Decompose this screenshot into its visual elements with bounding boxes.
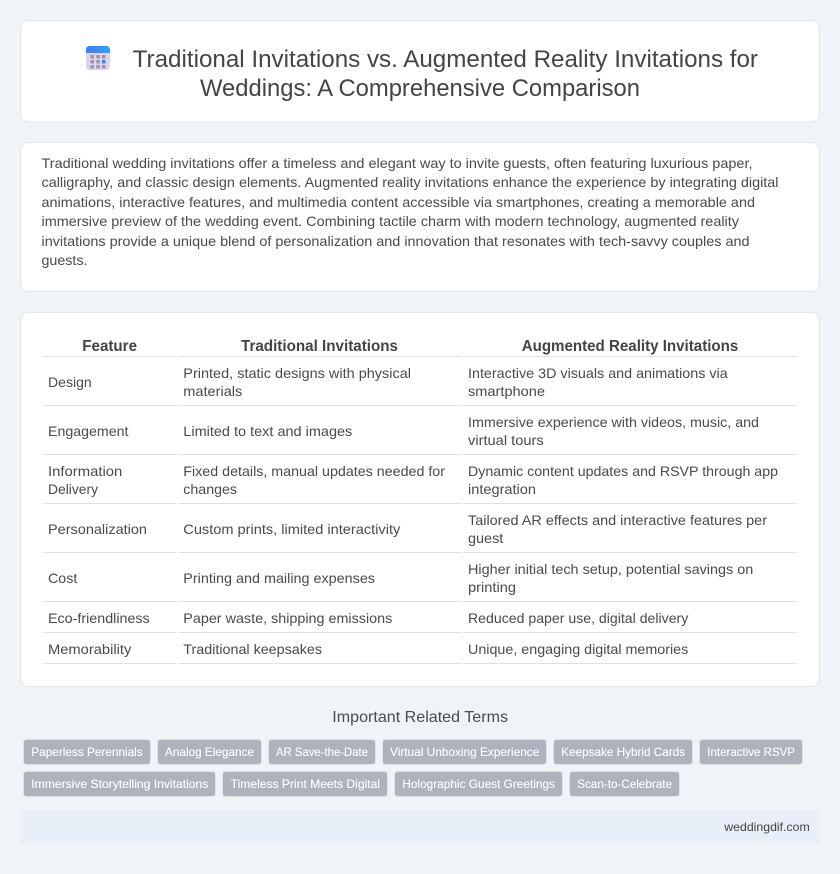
table row: personalization [48,512,767,546]
table row: cost: Printing and mailing expenses [183,570,375,586]
table row: eco-friendliness [48,610,688,626]
heading: important related terms: Important Related Terms [332,709,508,726]
related term tags: Scan-to-Celebrate [577,777,672,791]
text block: introduction paragraph: immersive preview of the wedding event. Combining tactile charm with modern technology, augmented reality [42,213,739,229]
table header: Feature [82,338,137,355]
table row: design [48,365,728,399]
related term tags: Interactive RSVP [707,745,795,759]
table header: Traditional Invitations [241,338,398,355]
table row: engagement: Engagement [48,423,129,439]
related term tags: Immersive Storytelling Invitations [31,777,208,791]
table row: information delivery: Delivery [48,481,98,497]
table row: design: Interactive 3D visuals and animations via [468,365,728,381]
table row: information delivery [48,463,778,497]
panel: comparison table [20,312,820,686]
text block: introduction paragraph: Traditional wedding invitations offer a timeless and elegant way to invite guests, often featuring luxurious paper, [42,155,752,171]
title: Traditional Invitations vs. Augmented Reality Invitations for [133,46,758,73]
panel: title card [20,20,820,122]
table row: personalization: Custom prints, limited interactivity [183,521,400,537]
table row: personalization: Tailored AR effects and interactive features per [468,512,767,528]
title: Weddings: A Comprehensive Comparison [200,75,640,102]
table row: eco-friendliness: Paper waste, shipping emissions [183,610,392,626]
table row: information delivery: integration [468,481,536,497]
table row: eco-friendliness: Reduced paper use, digital delivery [468,610,688,626]
table row: cost: Cost [48,570,77,586]
table row: design: smartphone [468,383,545,399]
table row: information delivery: Dynamic content updates and RSVP through app [468,463,778,479]
text block: introduction paragraph: calligraphy, and classic design elements. Augmented reality invitations enhance the experience by integrating digital [42,174,778,190]
table row: information delivery: Fixed details, manual updates needed for [183,463,445,479]
related term tags: AR Save-the-Date [276,745,368,759]
footer: weddingdif.com [723,820,810,834]
table row: engagement: virtual tours [468,432,544,448]
table row: eco-friendliness: Eco-friendliness [48,610,150,626]
text block: introduction paragraph: invitations provide a unique blend of personalization and innovation that resonates with tech-savvy couples and [42,233,750,249]
table row: engagement [48,414,759,448]
table row: cost: printing [468,579,516,595]
related term tags: Keepsake Hybrid Cards [561,745,685,759]
table row: personalization: guest [468,530,503,546]
table row: engagement: Limited to text and images [183,423,352,439]
icon: calendar [86,46,110,70]
table row: information delivery: Information [48,463,122,479]
table row: memorability: Traditional keepsakes [183,641,322,657]
table row: information delivery: changes [183,481,237,497]
related term tags: Timeless Print Meets Digital [231,777,380,791]
table row: memorability: Memorability [48,641,131,657]
table row: design: Printed, static designs with physical [183,365,411,381]
table row: cost [48,561,753,595]
related term tags: Virtual Unboxing Experience [390,745,540,759]
related term tags: Paperless Perennials [31,745,143,759]
related term tags [24,740,802,796]
text block: introduction paragraph [42,155,778,268]
table row: memorability: Unique, engaging digital memories [468,641,688,657]
table header: Augmented Reality Invitations [522,338,738,355]
table header [82,338,738,355]
footer [20,810,820,844]
related term tags: Analog Elegance [165,745,254,759]
text block: introduction paragraph: animations, interactive features, and multimedia content accessible via smartphones, creating a memorable and [42,194,755,210]
title [133,46,758,102]
table row: personalization: Personalization [48,521,147,537]
table row: cost: Higher initial tech setup, potential savings on [468,561,753,577]
panel: introduction [20,142,820,292]
table row: memorability [48,641,688,657]
related term tags: Holographic Guest Greetings [402,777,555,791]
table row: engagement: Immersive experience with videos, music, and [468,414,759,430]
table row: design: materials [183,383,242,399]
text block: introduction paragraph: guests. [42,252,88,268]
table row: design: Design [48,374,92,390]
